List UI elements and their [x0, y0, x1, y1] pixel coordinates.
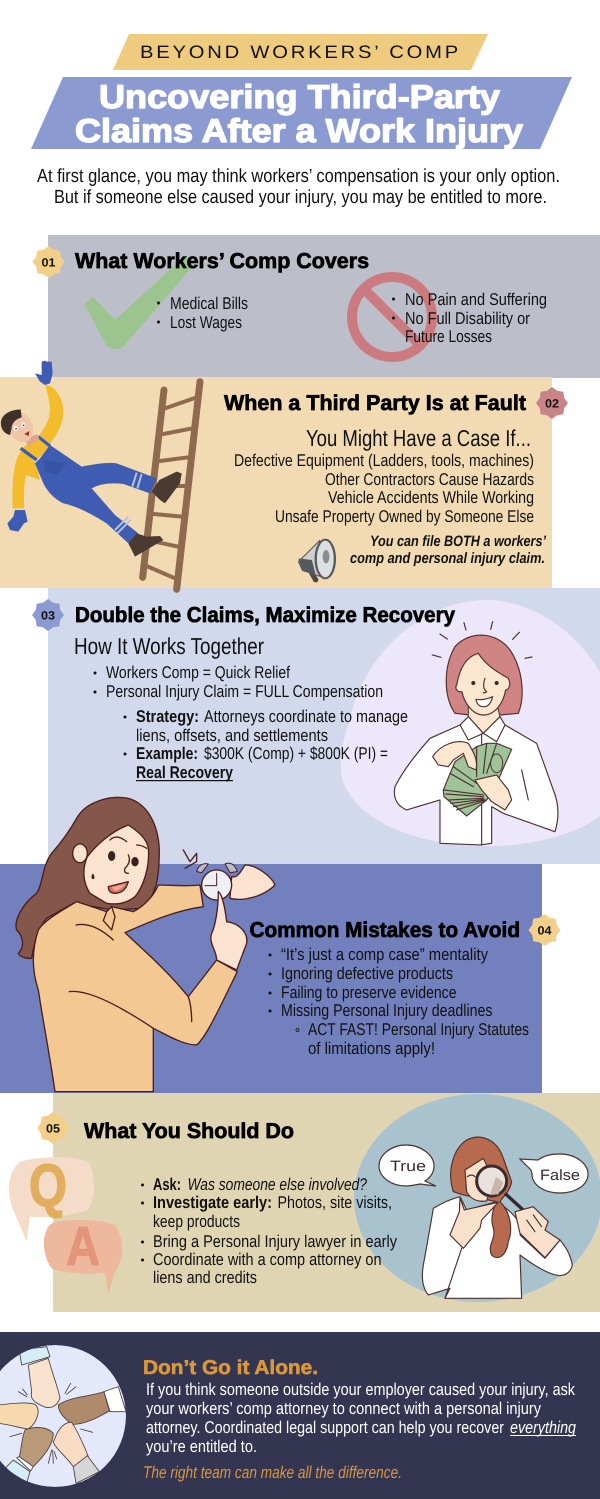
body text: you’re entitled to. [146, 1437, 257, 1456]
illustration: woman checking clock [16, 797, 275, 1092]
body text: everything [510, 1418, 576, 1437]
mistakes list: Failing to preserve evidence [281, 983, 456, 1002]
case list: Other Contractors Cause Hazards [325, 470, 534, 489]
icon: Q bubble: Q [29, 1152, 67, 1219]
illustration: fists in a circle [0, 1345, 126, 1487]
illustration: woman with money [394, 622, 558, 845]
title banner: Uncovering Third-Party [99, 78, 501, 115]
illustration: woman with magnifier [422, 1137, 572, 1298]
icon: A bubble: A [66, 1215, 100, 1277]
title banner [31, 77, 572, 149]
covered list [157, 294, 248, 332]
not covered list: Future Losses [405, 327, 492, 346]
callout: You can file BOTH a workers’ [370, 533, 547, 550]
panel 1: what workers comp covers [32, 235, 600, 378]
intro text [37, 166, 560, 208]
badge 02 [536, 387, 568, 419]
title banner: Claims After a Work Injury [75, 112, 524, 149]
panel 4: common mistakes [0, 797, 560, 1093]
body text: your workers’ comp attorney to connect with a personal injury [146, 1399, 541, 1418]
speech bubble: false: False [540, 1167, 580, 1184]
covered list: Lost Wages [170, 313, 242, 332]
tagline: The right team can make all the difference. [143, 1463, 402, 1482]
list: strategy and example [124, 707, 408, 782]
mistakes list: ACT FAST! Personal Injury Statutes [308, 1020, 529, 1039]
actions list: Bring a Personal Injury lawyer in early [153, 1232, 397, 1251]
heading 04: Common Mistakes to Avoid [250, 918, 520, 942]
callout: comp and personal injury claim. [350, 550, 545, 567]
badge 05 [37, 1112, 69, 1144]
mistakes list: “It’s just a comp case” mentality [281, 945, 488, 964]
callout [350, 533, 547, 567]
case list: Defective Equipment (Ladders, tools, machines) [234, 451, 534, 470]
badge 04 [528, 914, 560, 946]
badge 01: 01 [42, 256, 56, 270]
body text [146, 1380, 576, 1456]
body text: attorney. Coordinated legal support can help you recover [146, 1418, 504, 1437]
list: strategy and example: liens, offsets, and settlements [136, 726, 328, 745]
actions list: Was someone else involved? [188, 1175, 367, 1194]
worker [1, 361, 182, 557]
actions list: Investigate early: [153, 1193, 272, 1212]
covered list: Medical Bills [170, 294, 248, 313]
case list [234, 451, 534, 526]
icon: Q bubble [9, 1152, 94, 1242]
panel 6: call to action [0, 1332, 600, 1499]
icon: megaphone [299, 540, 335, 580]
badge 02: 02 [545, 396, 559, 410]
list: how it works [94, 663, 383, 701]
kicker banner: BEYOND WORKERS’ COMP [140, 42, 461, 62]
speech bubble: true [379, 1145, 436, 1186]
actions list: liens and credits [153, 1268, 257, 1287]
case list: Vehicle Accidents While Working [328, 488, 534, 507]
teal circle [354, 1094, 600, 1302]
list: strategy and example: Attorneys coordinate to manage [204, 707, 408, 726]
list: how it works: Personal Injury Claim = FULL Compensation [106, 682, 383, 701]
icon: A bubble [44, 1215, 122, 1293]
mistakes list: Ignoring defective products [281, 964, 453, 983]
heading 02: When a Third Party Is at Fault [224, 391, 526, 415]
list: strategy and example: Real Recovery [136, 763, 233, 782]
subheading 03: How It Works Together [74, 633, 264, 659]
speech bubble: false [520, 1154, 588, 1193]
not covered list: No Pain and Suffering [405, 290, 547, 309]
panel 3: double the claims [32, 588, 600, 864]
mistakes list: of limitations apply! [308, 1039, 435, 1058]
mistakes list: Missing Personal Injury deadlines [281, 1001, 492, 1020]
ladder [143, 382, 200, 589]
actions list [141, 1175, 397, 1287]
not covered list [392, 290, 547, 346]
badge 01 [32, 246, 64, 278]
case subheading: You Might Have a Case If... [306, 425, 531, 451]
icon: green check mark [86, 257, 191, 348]
actions list: keep products [153, 1212, 240, 1231]
actions list: Coordinate with a comp attorney on [153, 1250, 382, 1269]
not covered list: No Full Disability or [405, 309, 530, 328]
actions list: Ask: [153, 1175, 181, 1194]
badge 05: 05 [46, 1122, 60, 1136]
heading 03: Double the Claims, Maximize Recovery [75, 603, 455, 627]
heading 01: What Workers’ Comp Covers [75, 249, 369, 273]
panel 2: third party at fault [0, 377, 568, 588]
kicker banner [113, 34, 488, 70]
list: strategy and example: Strategy: [136, 707, 199, 726]
badge 03 [32, 599, 64, 631]
actions list: Photos, site visits, [278, 1193, 392, 1212]
speech bubble: true: True [390, 1158, 426, 1175]
illustration: falling worker and ladder [1, 361, 200, 589]
icon: prohibition sign [352, 277, 432, 357]
lavender blob [341, 600, 600, 846]
mistakes list [268, 945, 529, 1058]
heading 05: What You Should Do [84, 1119, 294, 1143]
badge 03: 03 [41, 608, 55, 622]
list: strategy and example: $300K (Comp) + $800K (PI) = [204, 744, 388, 763]
panel 5: what you should do [9, 1093, 600, 1312]
badge 04: 04 [538, 924, 552, 938]
list: strategy and example: Example: [136, 744, 198, 763]
list: how it works: Workers Comp = Quick Relief [106, 663, 290, 682]
case list: Unsafe Property Owned by Someone Else [275, 507, 534, 526]
heading: don't go it alone: Don’t Go it Alone. [143, 1357, 318, 1379]
